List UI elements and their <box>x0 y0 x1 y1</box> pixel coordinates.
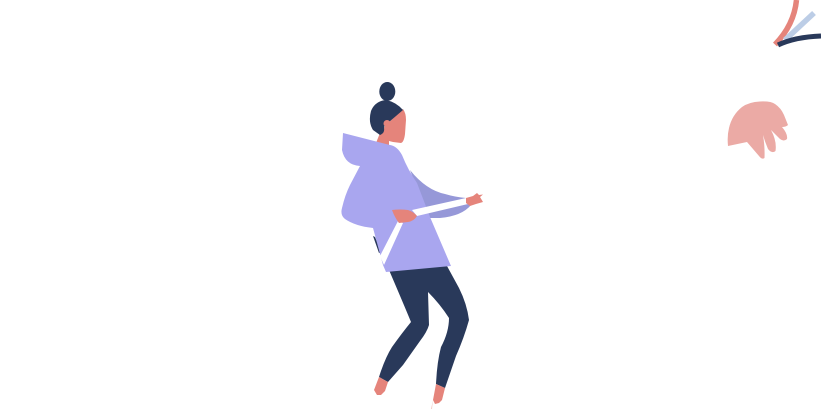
plant: pink leaf cluster <box>728 101 788 159</box>
stem: salmon <box>775 0 796 44</box>
foot: left <box>374 377 388 395</box>
toe sliver <box>431 400 433 409</box>
back strap shadow <box>373 236 381 253</box>
hand: near <box>392 210 417 223</box>
hoodie body <box>341 133 451 272</box>
white strap across body <box>380 198 468 265</box>
stem: navy <box>778 36 821 45</box>
plant: top right stems <box>775 0 821 45</box>
neck and face <box>376 109 406 147</box>
figure: walking woman in hoodie <box>341 82 483 409</box>
legs: navy leggings <box>379 266 469 388</box>
ear <box>384 120 390 127</box>
hand: far <box>466 193 483 206</box>
stem: pale blue <box>785 13 814 40</box>
foot: right <box>433 384 445 404</box>
far sleeve: darker lilac <box>410 170 471 218</box>
hair <box>370 100 403 135</box>
hair bun <box>379 82 395 101</box>
